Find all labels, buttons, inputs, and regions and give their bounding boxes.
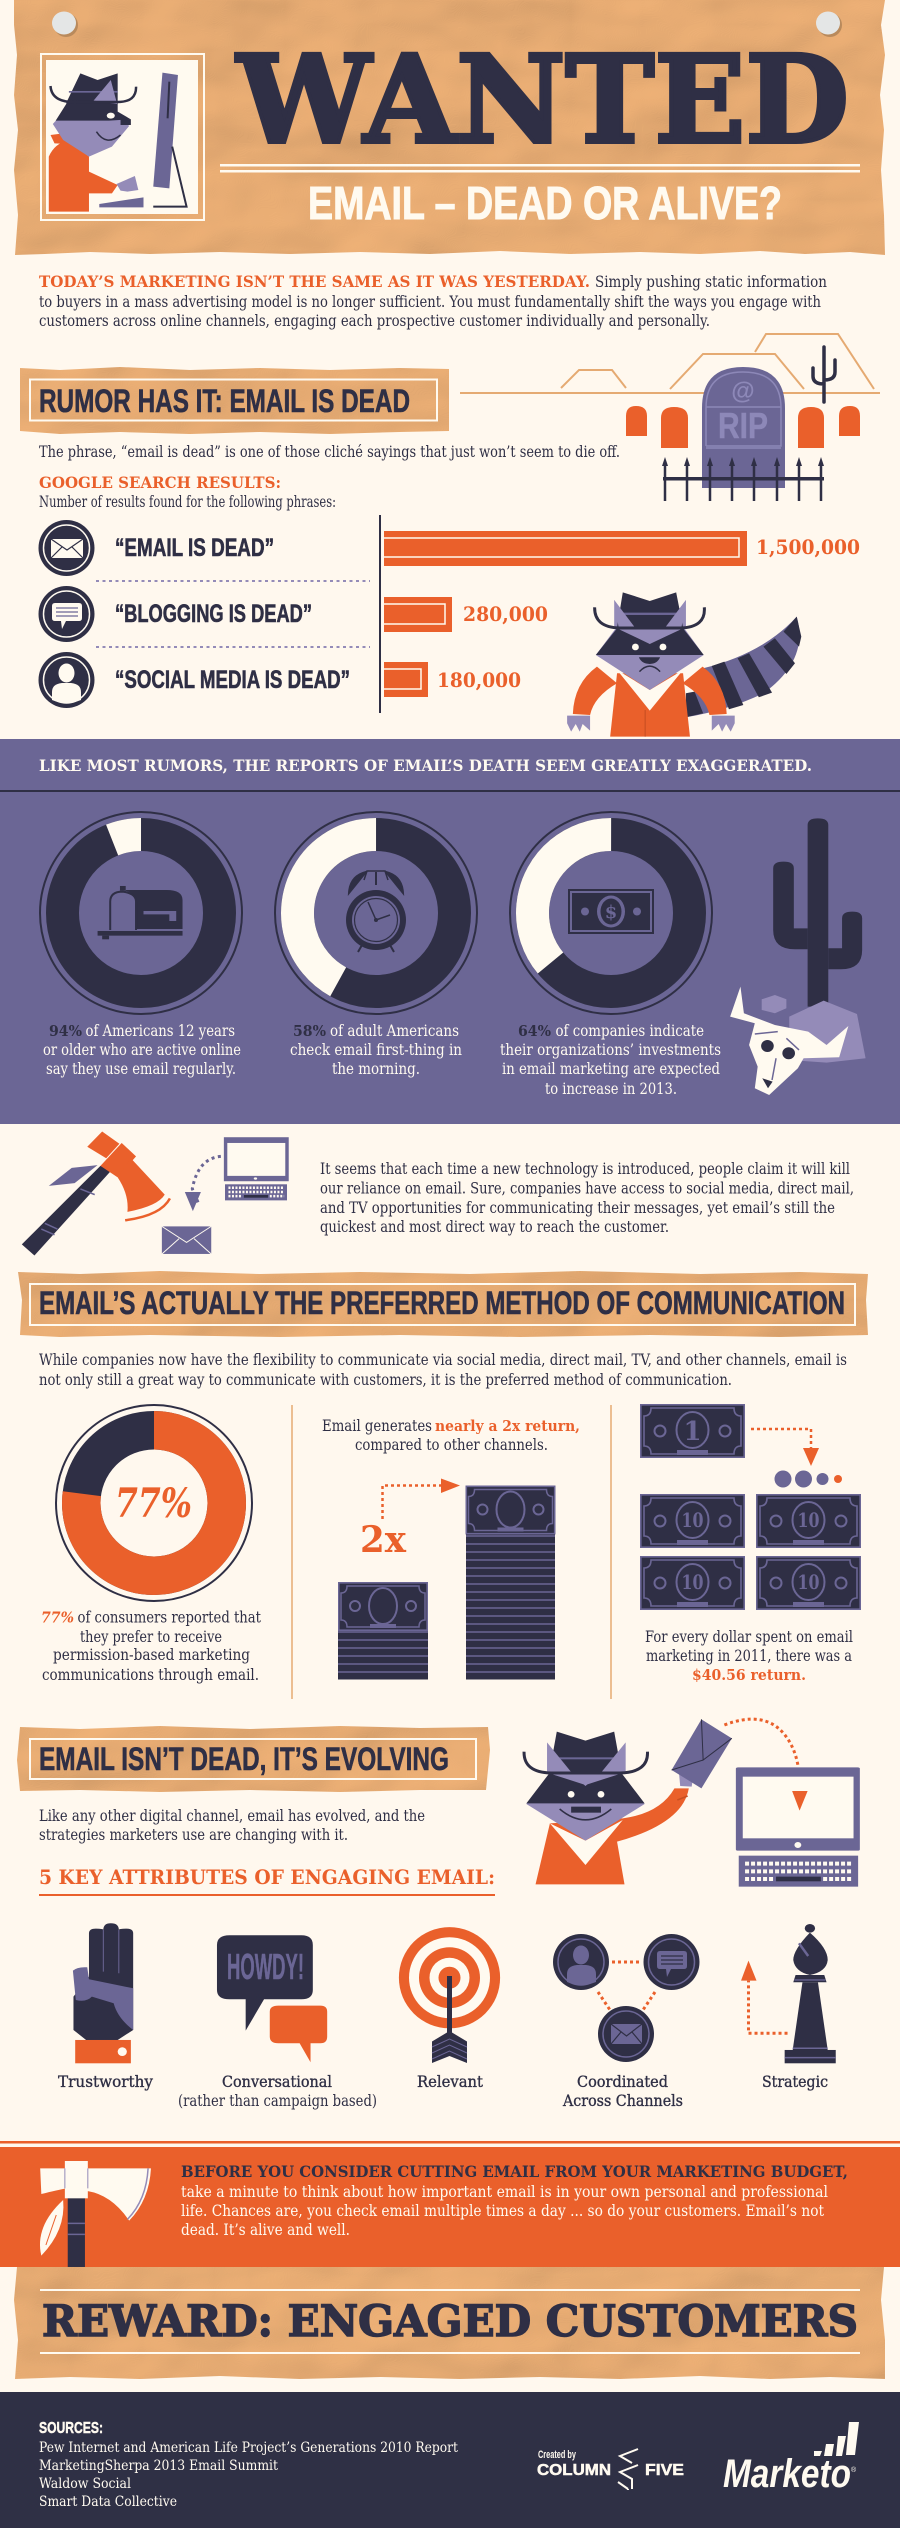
sources: Smart Data Collective (39, 2494, 177, 2510)
attribute: conversational (178, 1935, 377, 2110)
logo: Marketo: ® (851, 2466, 857, 2474)
illustration: cactus and skull (730, 818, 866, 1095)
sources: Pew Internet and American Life Project’s Generations 2010 Report (39, 2440, 458, 2456)
heading: 5 key attributes: 5 KEY ATTRIBUTES OF ENGAGING EMAIL: (39, 1865, 495, 1889)
text: 2x return: Email generates (322, 1417, 432, 1435)
attribute: relevant (399, 1927, 500, 2091)
sources: SOURCES: (39, 2420, 103, 2437)
label: email is dead: “EMAIL IS DEAD” (115, 534, 274, 562)
footer (0, 2392, 900, 2528)
text: 94 percent (43, 1022, 241, 1078)
iron fence (662, 457, 824, 501)
icon: speech bubbles (217, 1935, 327, 2062)
attribute: trustworthy (58, 1923, 153, 2091)
attribute: coordinated across channels: Coordinated (577, 2073, 668, 2091)
portrait of raccoon at computer (41, 54, 204, 220)
icon: person badge (553, 1934, 609, 1990)
heading: email is evolving (17, 1726, 490, 1792)
arrow: dotted up and right (382, 1478, 460, 1519)
one dollar bill (640, 1404, 745, 1458)
attribute: relevant: Relevant (417, 2073, 484, 2091)
label: blogging is dead: “BLOGGING IS DEAD” (115, 600, 312, 628)
subtitle: EMAIL – DEAD OR ALIVE? (308, 177, 782, 229)
illustration: graveyard landscape (460, 334, 880, 501)
attribute: trustworthy: Trustworthy (58, 2073, 153, 2091)
ten dollar bill bottom right (756, 1556, 861, 1610)
attribute: conversational: Conversational (222, 2073, 332, 2091)
text: call to action: life. Chances are, you check email multiple times a day ... so do your customers. Email’s not (181, 2202, 825, 2220)
text: 58 percent (290, 1022, 462, 1078)
icon: speech bubble badge (38, 586, 94, 642)
text: 58 percent: check email first-thing in (290, 1041, 462, 1059)
text: 58 percent: the morning. (332, 1060, 420, 1078)
text: rumor description: The phrase, “email is dead” is one of those cliché sayings that just won’t seem to die off. (39, 443, 620, 461)
ten dollar bill top left: 10 (682, 1508, 704, 1532)
sources: Waldow Social (39, 2476, 131, 2492)
donut: 64 percent (500, 802, 722, 1024)
bar: email is dead: 1,500,000 (756, 535, 860, 559)
text: 40.56 return: For every dollar spent on email (645, 1628, 853, 1646)
pin left (52, 12, 78, 37)
reward poster (14, 2267, 885, 2379)
heading: google search results: GOOGLE SEARCH RESULTS: (39, 473, 281, 492)
ten dollar bill bottom left: 10 (682, 1570, 704, 1594)
text: call to action: take a minute to think about how important email is in your own personal and professional (181, 2183, 828, 2201)
logo: Column Five: COLUMN (537, 2462, 611, 2479)
text: 94 percent: of Americans 12 years (86, 1022, 235, 1040)
bar: blogging is dead: 280,000 (463, 602, 548, 626)
chart: money stacks 2x (338, 1478, 556, 1680)
donut: 94 percent (39, 811, 243, 1015)
illustration: raccoon throwing email into computer (524, 1719, 860, 1887)
title: reward: REWARD: ENGAGED CUSTOMERS (42, 2297, 858, 2347)
text: call to action: BEFORE YOU CONSIDER CUTTING EMAIL FROM YOUR MARKETING BUDGET, (181, 2162, 848, 2181)
dotted connectors (598, 1962, 655, 2010)
tall money stack (466, 1486, 556, 1680)
label: 2x: 2x (360, 1519, 407, 1561)
pin right (816, 12, 842, 37)
ten dollar bill top right: 10 (798, 1508, 820, 1532)
heading: rumor has it: RUMOR HAS IT: EMAIL IS DEAD (39, 383, 410, 419)
arrow: dotted down (751, 1429, 819, 1466)
icon: envelope badge (598, 2006, 654, 2062)
tombstone with RIP: RIP (718, 405, 768, 446)
wanted poster header (14, 0, 885, 255)
heading: exaggerated: LIKE MOST RUMORS, THE REPORTS OF EMAIL’S DEATH SEEM GREATLY EXAGGERATED. (39, 756, 812, 775)
text: evolving: strategies marketers use are changing with it. (39, 1826, 348, 1844)
icon: dollar bill (569, 890, 653, 933)
panel: exaggerated rumors (0, 739, 900, 1124)
text: 64 percent: 64% (518, 1023, 551, 1040)
attribute: conversational: (rather than campaign based) (178, 2092, 377, 2110)
ten dollar bill top right (756, 1494, 861, 1548)
text: 94 percent: say they use email regularly. (46, 1060, 236, 1078)
icon: person badge (38, 652, 94, 708)
text: 77 percent: 77% (41, 1610, 74, 1626)
intro text: Simply pushing static information (595, 273, 827, 291)
logo: Marketo: Marketo (723, 2452, 851, 2496)
text: 77 percent (41, 1608, 262, 1684)
icon: alarm clock (346, 871, 406, 952)
text: 64 percent (500, 1022, 721, 1098)
donut: 77 percent (56, 1405, 252, 1601)
tombstone with RIP: @ (731, 378, 755, 405)
text: call to action (181, 2162, 848, 2239)
donut: 77 percent: 77% (115, 1480, 192, 1527)
logo: Column Five: FIVE (645, 2462, 684, 2479)
ten dollar bill bottom left (640, 1556, 745, 1610)
illustration: axe killing email (22, 1131, 289, 1255)
text: new technology (320, 1160, 854, 1236)
icon: envelope badge (38, 520, 94, 576)
icon: chess bishop with arrow (741, 1924, 836, 2063)
text: 2x return: nearly a 2x return, (435, 1418, 580, 1435)
text: new technology: quickest and most direct way to reach the customer. (320, 1218, 669, 1236)
icon: dollar bill: $ (605, 902, 617, 923)
text: 2x return (322, 1417, 580, 1454)
sources (39, 2420, 458, 2510)
text: 40.56 return: marketing in 2011, there was a (646, 1647, 852, 1665)
text: 58 percent: of adult Americans (330, 1022, 459, 1040)
icon: speech bubble badge (644, 1934, 700, 1990)
title rules (220, 164, 860, 172)
attribute: coordinated across channels: Across Channels (562, 2092, 683, 2110)
orange bushes (626, 406, 860, 448)
text: 64 percent: their organizations’ investments (500, 1041, 721, 1059)
text: 94 percent: or older who are active online (43, 1041, 241, 1059)
tombstone with RIP (702, 367, 785, 488)
bar: social media is dead (384, 662, 521, 697)
bar: blogging is dead (384, 597, 548, 632)
icon: scout honor hand (73, 1923, 133, 2063)
sources: MarketingSherpa 2013 Email Summit (39, 2458, 278, 2474)
heading: google search results (39, 473, 336, 511)
heading: email is evolving: EMAIL ISN’T DEAD, IT’S EVOLVING (39, 1741, 449, 1777)
heading: google search results: Number of results found for the following phrases: (39, 493, 336, 511)
text: 94 percent: 94% (49, 1023, 82, 1040)
text: 64 percent: to increase in 2013. (545, 1080, 677, 1098)
attribute: strategic: Strategic (762, 2073, 828, 2091)
bar chart: search results (38, 515, 860, 713)
logo: Column Five (537, 2449, 684, 2490)
icon: mailbox (98, 886, 183, 939)
text: 77 percent: they prefer to receive (80, 1628, 222, 1646)
text: 64 percent: in email marketing are expected (502, 1060, 720, 1078)
text: 77 percent: permission-based marketing (53, 1646, 250, 1664)
ten dollar bill top left (640, 1494, 745, 1548)
attribute: conversational: HOWDY! (227, 1946, 304, 1987)
bar: social media is dead: 180,000 (437, 668, 521, 692)
text: evolving: Like any other digital channel, email has evolved, and the (39, 1807, 425, 1825)
ten dollar bill bottom right: 10 (798, 1570, 820, 1594)
bar: email is dead (384, 531, 860, 566)
text: 64 percent: of companies indicate (556, 1022, 704, 1040)
text: 40.56 return: $40.56 return. (692, 1666, 806, 1684)
text: 77 percent: communications through email. (42, 1666, 259, 1684)
ellipsis dots (774, 1470, 842, 1488)
attribute: strategic (741, 1924, 836, 2091)
one dollar bill: 1 (683, 1417, 702, 1447)
icon: target with arrow (399, 1927, 500, 2063)
text: call to action: dead. It’s alive and well. (181, 2221, 350, 2239)
text: 40.56 return (645, 1628, 853, 1684)
title: WANTED: WANTED (235, 28, 849, 171)
crumpled paper poster (14, 0, 885, 255)
text: 58 percent: 58% (293, 1023, 326, 1040)
logo: Marketo (723, 2422, 859, 2496)
text: evolving (39, 1807, 425, 1844)
text: 77 percent: of consumers reported that (78, 1608, 262, 1626)
panel: call to action (0, 2141, 900, 2267)
small money stack (338, 1582, 428, 1680)
text: 2x return: compared to other channels. (355, 1436, 548, 1454)
intro text: TODAY’S MARKETING ISN’T THE SAME AS IT WAS YESTERDAY. (39, 272, 590, 291)
intro text (39, 272, 827, 330)
text: preferred method (39, 1351, 847, 1389)
heading: preferred method (18, 1271, 868, 1337)
icon: small cactus (813, 347, 835, 402)
attribute: coordinated across channels (553, 1934, 700, 2110)
label: social media is dead: “SOCIAL MEDIA IS DEAD” (115, 666, 350, 694)
logo: Column Five: Created by (538, 2449, 577, 2461)
illustration: angry raccoon (567, 592, 801, 737)
chart: return on a dollar (640, 1404, 861, 1684)
text: preferred method: not only still a great way to communicate with customers, it is the preferred method of communication. (39, 1371, 732, 1389)
intro text: customers across online channels, engaging each prospective customer individually and personally. (39, 312, 710, 330)
donut: 58 percent (269, 806, 483, 1020)
heading: rumor has it (20, 367, 449, 434)
icon: white axe (40, 2161, 151, 2267)
